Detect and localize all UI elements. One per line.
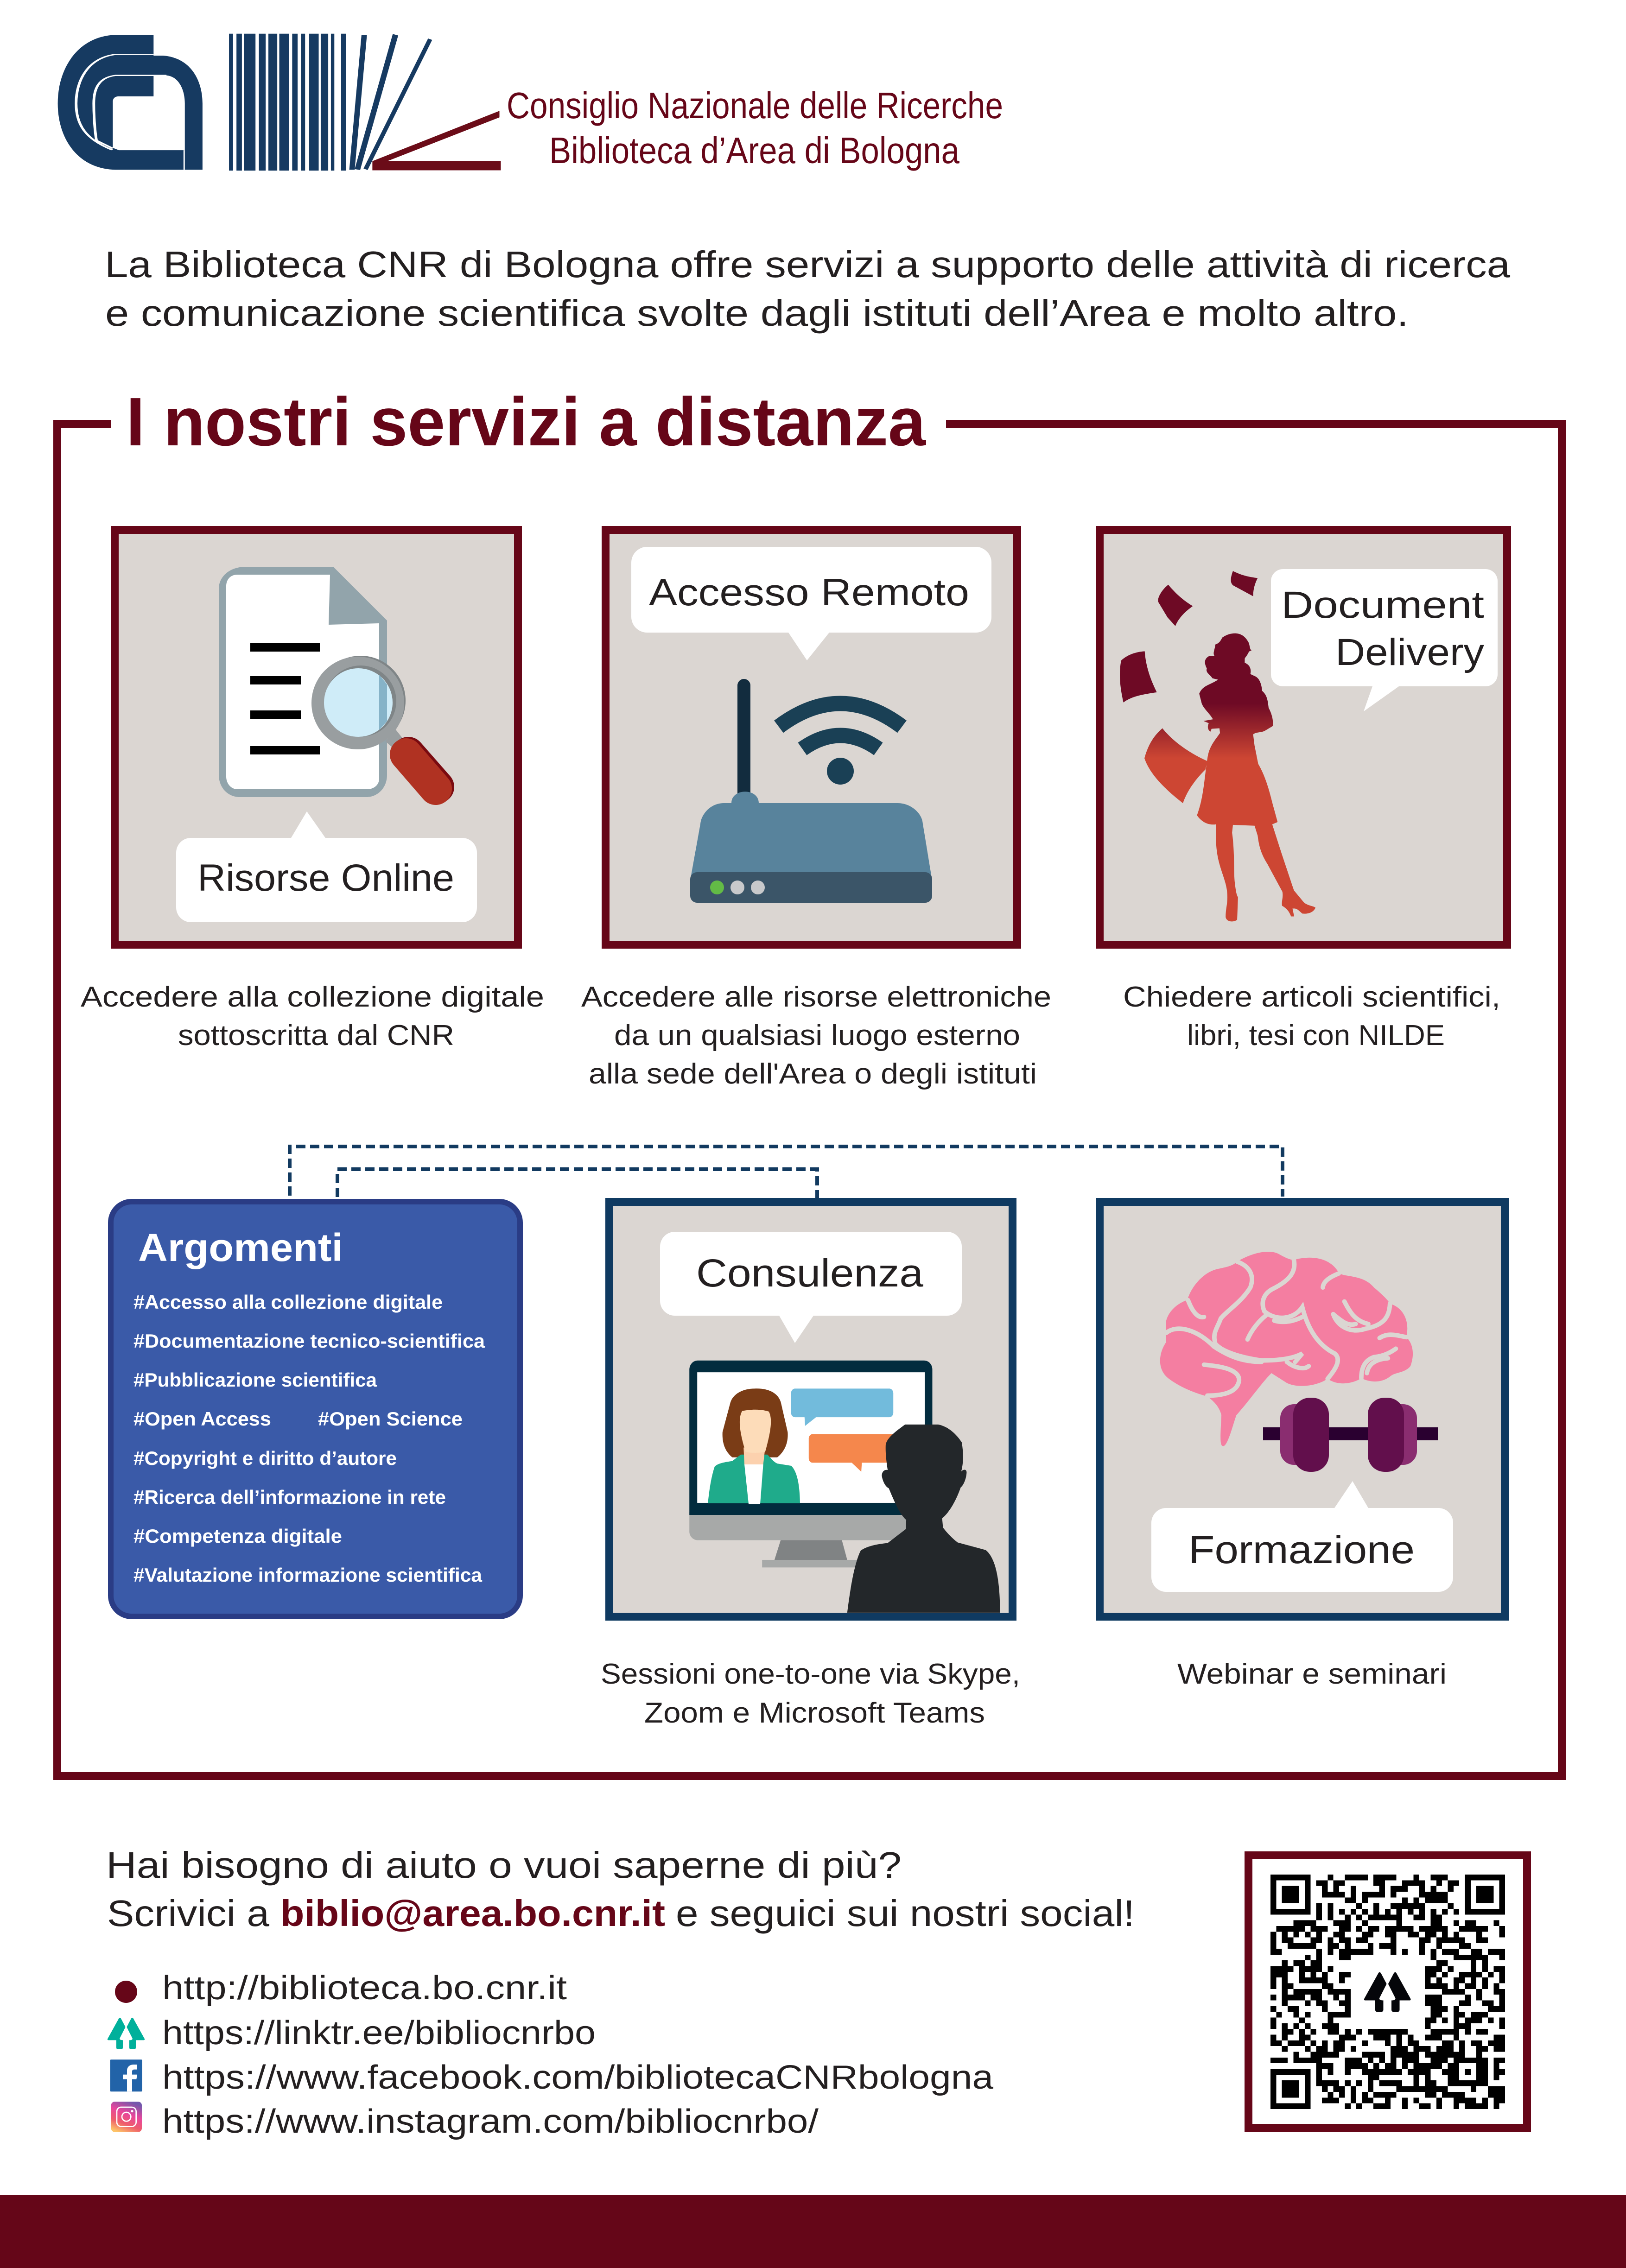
QR code <box>1249 1856 1527 2128</box>
link: website: http://biblioteca.bo.cnr.it <box>162 1970 567 2007</box>
topic list: #Pubblicazione scientifica <box>133 1369 377 1391</box>
icon: QR centre arrows <box>1364 1972 1411 2012</box>
icon: wifi router <box>690 679 932 903</box>
icon: document with magnifier <box>219 567 438 797</box>
caption: Accesso Remoto: alla sede dell'Area o degli istituti <box>589 1058 1037 1090</box>
icon: website dot <box>115 1981 137 2003</box>
panel: Document Delivery <box>1099 530 1507 944</box>
contact text: e seguici sui nostri social! <box>676 1893 1135 1934</box>
speech bubble: Formazione: Formazione <box>1188 1528 1415 1571</box>
caption: Consulenza <box>601 1658 1020 1729</box>
caption: Consulenza: Zoom e Microsoft Teams <box>644 1697 985 1729</box>
topic list <box>133 1291 485 1586</box>
caption: Risorse Online: sottoscritta dal CNR <box>178 1020 454 1052</box>
topic list: #Open Access <box>133 1408 271 1430</box>
topic list: #Accesso alla collezione digitale <box>133 1291 443 1313</box>
speech bubble: Formazione <box>1151 1481 1453 1592</box>
speech bubble: Document Delivery <box>1271 569 1498 711</box>
intro text <box>105 244 1511 334</box>
link: linktree: https://linktr.ee/bibliocnrbo <box>162 2015 596 2052</box>
topic list: #Valutazione informazione scientifica <box>133 1564 483 1586</box>
speech bubble: Accesso Remoto <box>631 547 991 660</box>
topic list: #Competenza digitale <box>133 1525 342 1547</box>
panel: Consulenza <box>609 1202 1012 1616</box>
topic list: #Open Science <box>318 1408 463 1430</box>
logo: book stripes <box>229 34 432 171</box>
speech bubble: Risorse Online <box>176 811 477 922</box>
contact text: biblio@area.bo.cnr.it <box>280 1893 665 1934</box>
logo text: Biblioteca d’Area di Bologna <box>549 130 959 171</box>
contact text: Scrivici a <box>107 1893 270 1934</box>
link: instagram: https://www.instagram.com/bibliocnrbo/ <box>162 2103 819 2140</box>
link: facebook: https://www.facebook.com/bibliotecaCNRbologna <box>162 2059 994 2096</box>
caption: Consulenza: Sessioni one-to-one via Skype, <box>601 1658 1020 1690</box>
services frame <box>57 424 1562 1776</box>
caption: Document Delivery: libri, tesi con NILDE <box>1187 1020 1445 1052</box>
speech bubble: Document Delivery: Document <box>1281 584 1484 626</box>
topic list: #Copyright e diritto d’autore <box>133 1447 397 1469</box>
caption: Accesso Remoto <box>581 981 1051 1090</box>
caption: Accesso Remoto: Accedere alle risorse elettroniche <box>581 981 1051 1013</box>
caption: Risorse Online: Accedere alla collezione digitale <box>81 981 544 1013</box>
icon: instagram <box>111 2102 142 2132</box>
topic list: #Ricerca dell’informazione in rete <box>133 1486 446 1508</box>
icon: brain <box>1160 1252 1413 1446</box>
logo: maroon book cover <box>372 111 501 170</box>
icon: woman silhouette with flying papers <box>1120 571 1315 921</box>
icon: man silhouette <box>847 1425 1000 1613</box>
panel: Accesso Remoto <box>605 530 1017 944</box>
dashed connector: Argomenti to Formazione <box>290 1147 1283 1197</box>
icon: linktree arrows <box>108 2018 145 2049</box>
caption: Document Delivery <box>1123 981 1500 1052</box>
logo: CNR mark <box>58 35 203 170</box>
panel: Formazione <box>1099 1202 1505 1616</box>
speech bubble: Document Delivery: Delivery <box>1335 631 1484 673</box>
speech bubble: Accesso Remoto: Accesso Remoto <box>649 571 969 614</box>
intro text: e comunicazione scientifica svolte dagli istituti dell’Area e molto altro. <box>105 292 1409 334</box>
heading: I nostri servizi a distanza <box>126 384 927 460</box>
caption: Risorse Online <box>81 981 544 1052</box>
contact text <box>106 1844 1135 1934</box>
icon: facebook <box>110 2059 142 2091</box>
panel: Argomenti <box>111 1202 520 1616</box>
speech bubble: Consulenza: Consulenza <box>696 1251 923 1295</box>
caption: Formazione: Webinar e seminari <box>1177 1658 1447 1690</box>
logo text: Consiglio Nazionale delle Ricerche <box>507 85 1003 126</box>
dashed connector: Argomenti to Consulenza <box>337 1169 817 1198</box>
logo text <box>507 85 1003 171</box>
speech bubble: Risorse Online: Risorse Online <box>197 857 454 899</box>
panel heading: Argomenti: Argomenti <box>138 1226 343 1269</box>
topic list: #Documentazione tecnico-scientifica <box>133 1330 485 1352</box>
caption: Document Delivery: Chiedere articoli scientifici, <box>1123 981 1500 1013</box>
logo: CNR and library <box>58 34 501 171</box>
caption: Accesso Remoto: da un qualsiasi luogo esterno <box>614 1020 1020 1052</box>
icon: dumbbell <box>1263 1398 1438 1472</box>
footer bar <box>0 2195 1626 2268</box>
panel: Risorse Online <box>115 530 518 944</box>
QR modules <box>1270 1875 1505 2109</box>
icon: video call on monitor <box>689 1361 1000 1613</box>
contact text: Hai bisogno di aiuto o vuoi saperne di più? <box>106 1844 902 1886</box>
speech bubble: Consulenza <box>660 1232 962 1343</box>
intro text: La Biblioteca CNR di Bologna offre servizi a supporto delle attività di ricerca <box>105 244 1511 285</box>
